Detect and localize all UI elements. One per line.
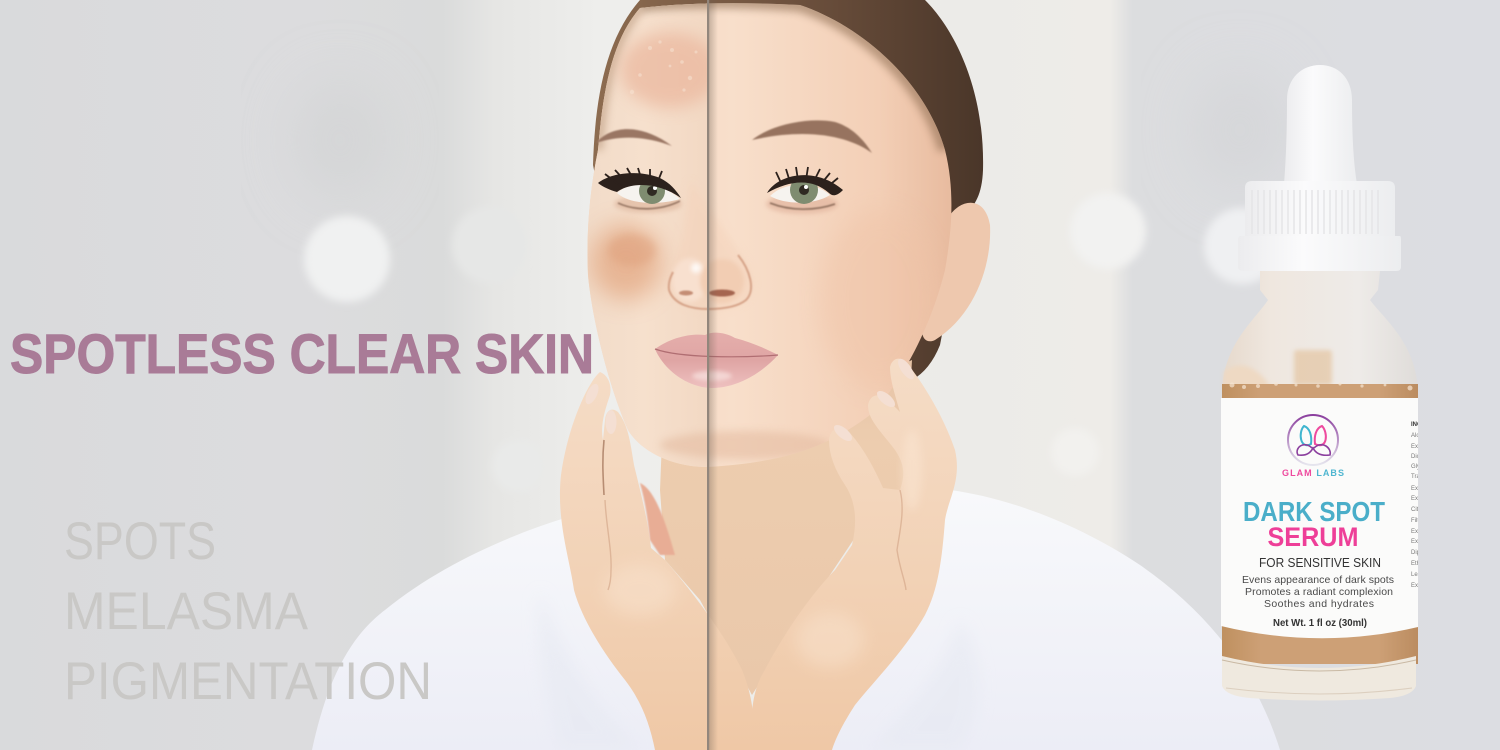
ingredients edge: Tranex <box>1411 474 1429 480</box>
left hand <box>560 372 754 750</box>
benefits: Evens appearance of dark spots <box>1242 574 1394 586</box>
ingredients edge: INGREDIENTS <box>1411 422 1452 428</box>
glass shoulder <box>1222 271 1418 395</box>
benefits: Soothes and hydrates <box>1264 598 1374 610</box>
before/after divider line <box>707 0 718 750</box>
hair <box>593 0 983 380</box>
ingredients edge: Glycerin <box>1411 464 1433 470</box>
serum foam line <box>1224 365 1270 392</box>
subtitle: FOR SENSITIVE SKIN <box>1259 555 1381 570</box>
ingredients edge: Ethyl <box>1411 561 1424 567</box>
ingredients edge: Dipot <box>1411 550 1425 556</box>
neck <box>660 360 912 695</box>
ingredients edge: Filtrate <box>1411 518 1430 524</box>
product name: DARK SPOT <box>1243 496 1385 527</box>
ingredients edge <box>1411 422 1418 587</box>
right eyebrow <box>752 120 872 153</box>
bubbles on serum surface <box>1230 382 1412 390</box>
left eyebrow <box>596 129 672 146</box>
dropper bulb <box>1284 65 1357 184</box>
concern: melasma: MELASMA <box>64 582 309 641</box>
glass base <box>1222 656 1416 700</box>
headline: spotless clear skin: SPOTLESS CLEAR SKIN <box>10 322 594 385</box>
ingredients edge: Dioxy <box>1411 454 1426 460</box>
concern: pigmentation: PIGMENTATION <box>64 652 432 711</box>
nose <box>668 180 753 310</box>
face <box>580 0 951 480</box>
woman: before and after portrait <box>312 0 1280 750</box>
brand logo <box>1288 415 1338 465</box>
left eye <box>598 168 682 213</box>
serum body <box>1222 384 1418 664</box>
ingredients edge: Extract <box>1411 583 1430 589</box>
lips <box>655 333 778 388</box>
ingredients edge: Citric <box>1411 507 1425 513</box>
product: dark spot serum bottle <box>1221 65 1418 700</box>
skin damage: forehead pigmentation <box>590 32 720 300</box>
ingredients edge: Extract <box>1411 529 1430 535</box>
right hand <box>751 356 957 750</box>
concern: spots: SPOTS <box>64 512 216 571</box>
ribbed collar <box>1238 181 1401 271</box>
right eye <box>766 167 843 214</box>
brand name: GLAM LABS <box>1282 468 1344 478</box>
concern list <box>64 512 432 711</box>
benefits <box>1242 574 1394 610</box>
ingredients edge: Extract <box>1411 486 1430 492</box>
net weight: Net Wt. 1 fl oz (30ml) <box>1273 617 1367 629</box>
right hand fingernails <box>831 356 917 444</box>
ingredients edge: Extract <box>1411 496 1430 502</box>
left hand fingernails <box>583 382 616 434</box>
ingredients edge: Leaf <box>1411 572 1423 578</box>
ear <box>922 203 990 341</box>
dropper tube <box>1294 350 1332 385</box>
benefits: Promotes a radiant complexion <box>1245 586 1393 598</box>
ingredients edge: Aloe <box>1411 433 1424 439</box>
shirt <box>312 490 1280 750</box>
label <box>1221 398 1418 638</box>
ingredients edge: Extract <box>1411 539 1430 545</box>
ingredients edge: Extract <box>1411 444 1430 450</box>
label: SERUM <box>1268 522 1358 552</box>
skin damage: melasma on cheek <box>590 224 662 300</box>
